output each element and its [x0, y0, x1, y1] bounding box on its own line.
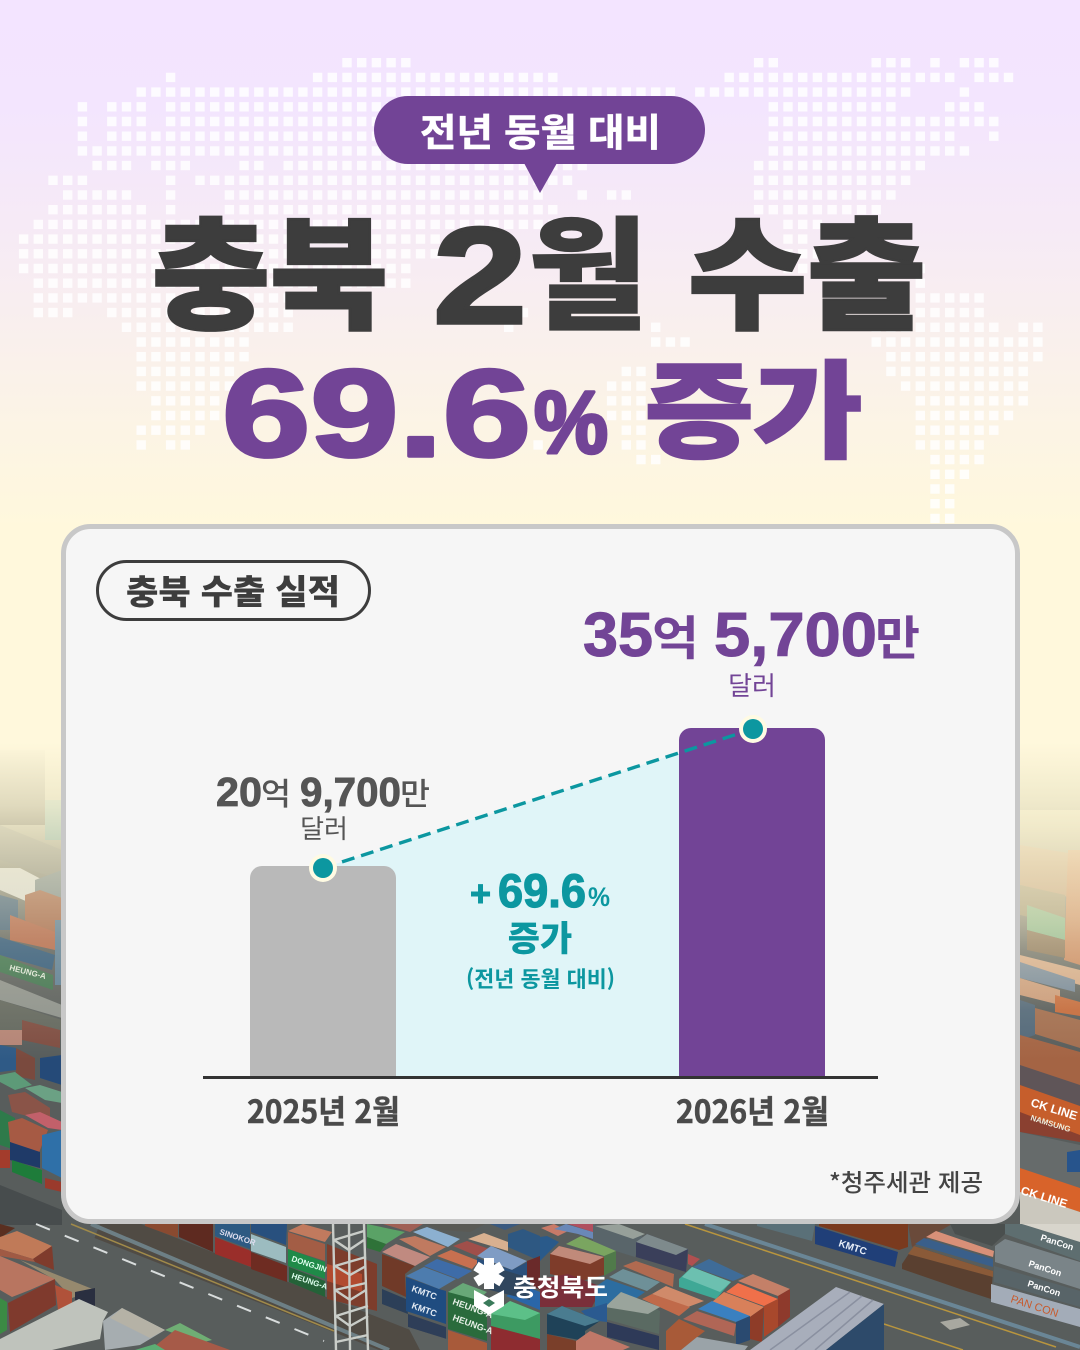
road lines at bottom	[36, 1224, 1080, 1350]
panel: export results card	[64, 526, 1018, 1222]
logo: 충청북도: 충청북도	[513, 1269, 608, 1304]
dotted world map	[19, 63, 1043, 518]
right side containers: CK LINE	[1029, 1095, 1079, 1123]
panel heading pill: 충북 수출 실적	[98, 562, 370, 620]
container block left of crane	[145, 1224, 377, 1311]
callout: +69.6% 증가: 증가	[508, 911, 572, 962]
bottom right containers: KMTC	[837, 1238, 868, 1258]
title line 2: 69.6% 증가	[222, 328, 862, 483]
bottom left containers	[0, 1224, 230, 1350]
value label 2026: 억	[652, 600, 699, 669]
central container block: KMTC	[410, 1283, 439, 1302]
value label 2025: 만	[400, 769, 430, 814]
axis line	[203, 1076, 878, 1079]
value label 2026: 달러	[728, 666, 776, 703]
panel heading pill: 충북 수출 실적: 충북 수출 실적	[126, 565, 340, 614]
value label 2025: 9,700	[300, 769, 401, 815]
title line 1: 충북 2월 수출: 2	[433, 200, 527, 353]
title line 1: 충북 2월 수출: 월	[528, 178, 648, 355]
title line 1: 충북 2월 수출	[152, 178, 926, 355]
container block left of crane: DONGJIN	[290, 1254, 328, 1274]
central container block	[367, 1224, 790, 1350]
x-axis labels: 2025년 2월	[247, 1087, 400, 1133]
central container block: HEUNG-A	[451, 1296, 495, 1320]
right side containers: NAMSUNG	[1029, 1113, 1072, 1134]
speech bubble: 전년 동월 대비	[374, 96, 705, 193]
speech bubble: 전년 동월 대비: 전년 동월 대비	[420, 102, 661, 157]
title line 2: 69.6% 증가: %	[534, 373, 608, 472]
bottom right containers: PanCon	[1026, 1278, 1062, 1298]
container block left of crane: SINOKOR	[218, 1227, 257, 1248]
value label 2025: 억	[261, 769, 291, 814]
callout: +69.6% 증가: +	[470, 873, 491, 914]
title line 2: 69.6% 증가: 증가	[645, 328, 862, 480]
bottom right containers: PanCon	[1039, 1232, 1075, 1252]
icon: provincial emblem	[474, 1258, 504, 1315]
callout: +69.6% 증가: (전년 동월 대비)	[466, 962, 615, 994]
value label 2025: 달러	[300, 809, 348, 846]
callout: +69.6% 증가: 69.6	[498, 864, 586, 917]
right side containers: CK LINE	[1019, 1183, 1069, 1211]
value label 2026: 5,700	[714, 601, 877, 670]
callout: +69.6% 증가	[466, 864, 615, 994]
source note: *청주세관 제공	[829, 1163, 983, 1198]
central container block: HEUNG-A	[451, 1312, 495, 1336]
value label 2026: 35	[583, 601, 653, 670]
title line 2: 69.6% 증가: 69.6	[222, 345, 531, 483]
background gradient fading into photo	[0, 0, 1080, 1060]
bar 2025	[250, 866, 396, 1077]
logo: 충청북도	[474, 1258, 608, 1315]
bar 2026	[679, 728, 825, 1077]
value label 2026: 만	[875, 600, 920, 669]
right side containers	[1019, 810, 1080, 1232]
value label 2025: 20	[216, 769, 262, 815]
value label 2025	[216, 769, 430, 846]
increase area between bars	[323, 729, 753, 1077]
x-axis labels	[247, 1087, 829, 1133]
title line 1: 충북 2월 수출: 충북	[152, 178, 388, 355]
callout: +69.6% 증가: %	[588, 882, 610, 912]
x-axis labels: 2026년 2월	[676, 1087, 829, 1133]
title line 1: 충북 2월 수출: 수출	[688, 178, 926, 355]
container block left of crane: HEUNG-A	[290, 1271, 329, 1292]
bottom right containers: PanCon	[1027, 1258, 1063, 1278]
value label 2026	[583, 600, 920, 703]
background photo: container port	[0, 700, 1080, 1350]
left side containers: HEUNG-A	[9, 963, 47, 981]
bottom right containers: PAN CON	[1009, 1293, 1060, 1320]
left side containers	[0, 750, 62, 1225]
central container block: KMTC	[410, 1300, 439, 1319]
crane tower	[333, 1224, 368, 1350]
bottom right containers	[750, 1224, 1080, 1350]
dashed trend line with markers	[309, 715, 767, 882]
